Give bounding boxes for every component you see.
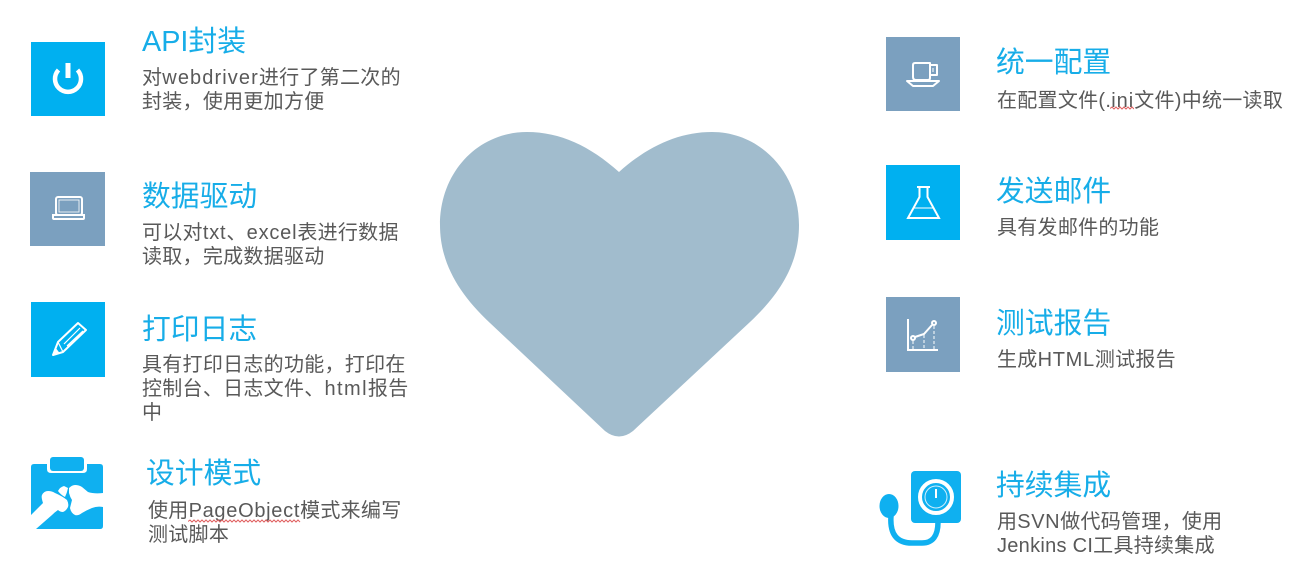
text: 持续集成 description [997, 510, 1222, 557]
icon: coffee cup [886, 37, 960, 111]
text: 设计模式 description: 使用PageObject模式来编写 [148, 500, 401, 522]
icon: flask [886, 165, 960, 240]
heading: 设计模式: 设计模式 [146, 458, 261, 490]
text: 打印日志 description: 具有打印日志的功能，打印在 [142, 354, 406, 376]
icon: pencil [31, 302, 105, 377]
heading: 发送邮件: 发送邮件 [996, 176, 1111, 208]
icon: clipboard with bone [31, 457, 103, 529]
icon: laptop [30, 172, 105, 246]
text: 持续集成 description: 用SVN做代码管理，使用 [997, 511, 1222, 533]
text: 数据驱动 description: 可以对txt、excel表进行数据 [142, 222, 399, 244]
text: 数据驱动 description: 读取，完成数据驱动 [142, 246, 325, 268]
text: 发送邮件 description: 具有发邮件的功能 [997, 217, 1159, 239]
text: 打印日志 description: 控制台、日志文件、html报告 [142, 378, 408, 400]
text: 打印日志 description: 中 [142, 402, 162, 424]
text: 设计模式 description [148, 500, 401, 546]
heading: 统一配置: 统一配置 [996, 47, 1111, 79]
icon: line chart [886, 297, 960, 372]
heading: 测试报告: 测试报告 [996, 308, 1111, 340]
text: 持续集成 description: Jenkins CI工具持续集成 [997, 535, 1215, 557]
text: 打印日志 description [142, 354, 408, 424]
text: 统一配置 description: 在配置文件(.ini文件)中统一读取 [997, 90, 1283, 112]
heading: 数据驱动: 数据驱动 [142, 181, 257, 213]
heading: 持续集成: 持续集成 [996, 470, 1111, 502]
text: API封装 description: 封装，使用更加方便 [142, 91, 325, 113]
heading: API封装: API封装 [142, 26, 246, 58]
spelling underline: PageObject [188, 519, 300, 523]
spelling underline: ini [1110, 106, 1134, 110]
text: 设计模式 description: 测试脚本 [148, 524, 229, 546]
text: API封装 description: 对webdriver进行了第二次的 [142, 67, 401, 89]
icon: power [31, 42, 105, 116]
text: 测试报告 description: 生成HTML测试报告 [997, 349, 1176, 371]
heading: 打印日志: 打印日志 [142, 314, 257, 346]
text: API封装 description [142, 67, 401, 113]
text: 数据驱动 description [142, 222, 399, 268]
